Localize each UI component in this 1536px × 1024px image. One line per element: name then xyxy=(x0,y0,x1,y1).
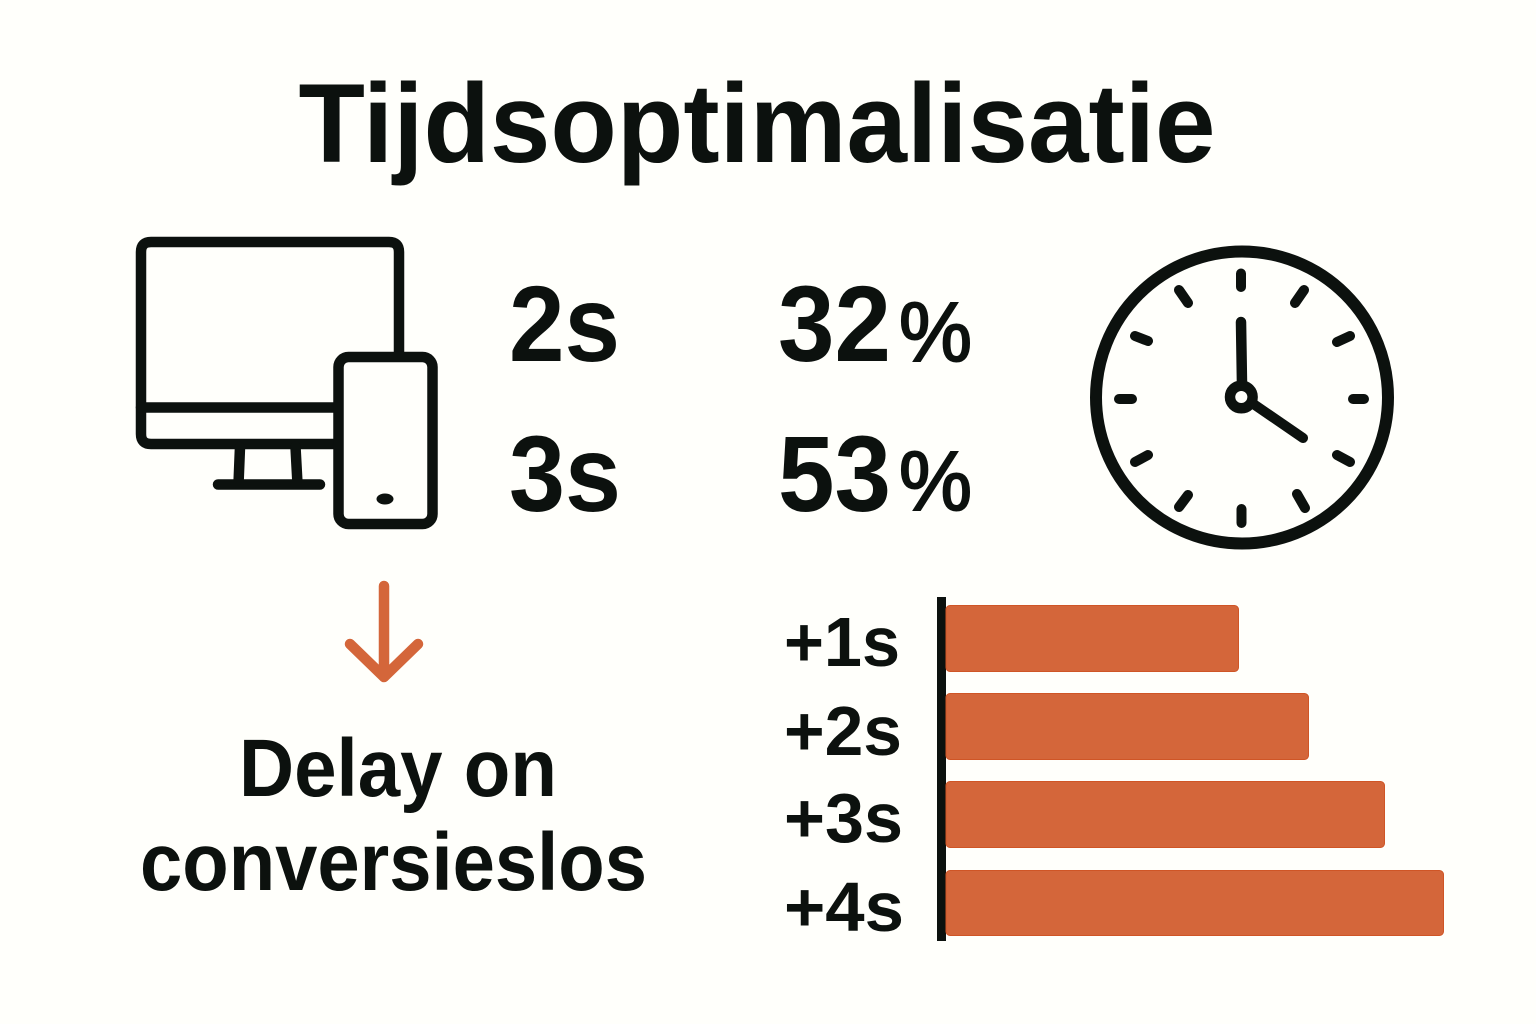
bar: +4s: +4s xyxy=(784,868,904,946)
stat: 53%: 53 xyxy=(778,413,891,534)
icon: clock xyxy=(1096,252,1388,544)
bar: +1s: +1s xyxy=(784,603,900,681)
bar: +3s: +3s xyxy=(784,779,903,857)
text: delay on conversieslos: conversieslos xyxy=(140,817,647,908)
bar: +4s xyxy=(784,868,1444,946)
stat: 53% xyxy=(778,413,972,534)
stat: 32%: % xyxy=(899,285,972,379)
stat: 32% xyxy=(778,263,972,384)
bar: +2s: +2s xyxy=(784,692,902,770)
text: delay on conversieslos: Delay on xyxy=(239,723,557,814)
bar: +1s xyxy=(784,603,1238,681)
bar: +2s xyxy=(784,692,1308,770)
icon: desktop monitor and phone xyxy=(141,242,432,524)
stat: 53%: % xyxy=(899,434,972,528)
text: delay on conversieslos xyxy=(140,723,647,908)
bar: +3s xyxy=(784,779,1384,857)
axis xyxy=(937,597,946,941)
stat: 3s: 3s xyxy=(509,413,621,534)
arrow: down xyxy=(350,586,418,677)
stat: 2s: 2s xyxy=(509,263,620,384)
stat: 32%: 32 xyxy=(778,263,891,384)
title: Tijdsoptimalisatie xyxy=(298,61,1216,186)
bar chart xyxy=(784,597,1444,946)
